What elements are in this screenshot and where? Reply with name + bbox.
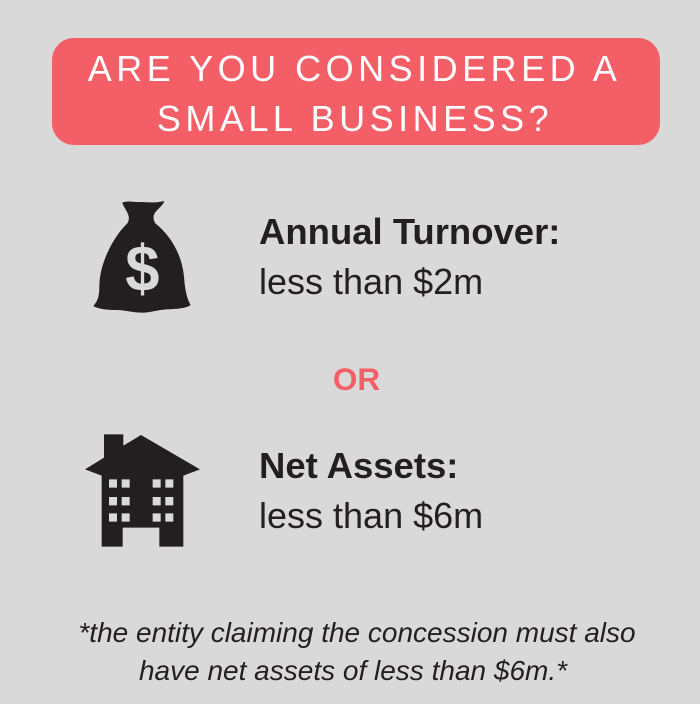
footnote [78, 617, 636, 686]
icon: money bag [93, 201, 191, 313]
footnote: have net assets of less than $6m.* [139, 655, 568, 686]
icon: money bag: $ [125, 233, 159, 305]
title banner: SMALL BUSINESS? [157, 98, 553, 139]
annual turnover text [259, 211, 560, 302]
net assets text [259, 445, 483, 536]
net assets text: Net Assets: [259, 445, 458, 486]
icon: apartment house [85, 434, 200, 547]
OR label: OR [333, 361, 380, 397]
net assets text: less than $6m [259, 495, 483, 536]
footnote: *the entity claiming the concession must also [78, 617, 636, 648]
annual turnover text: Annual Turnover: [259, 211, 560, 252]
title banner [52, 38, 660, 145]
annual turnover text: less than $2m [259, 261, 483, 302]
title banner: ARE YOU CONSIDERED A [88, 48, 621, 89]
